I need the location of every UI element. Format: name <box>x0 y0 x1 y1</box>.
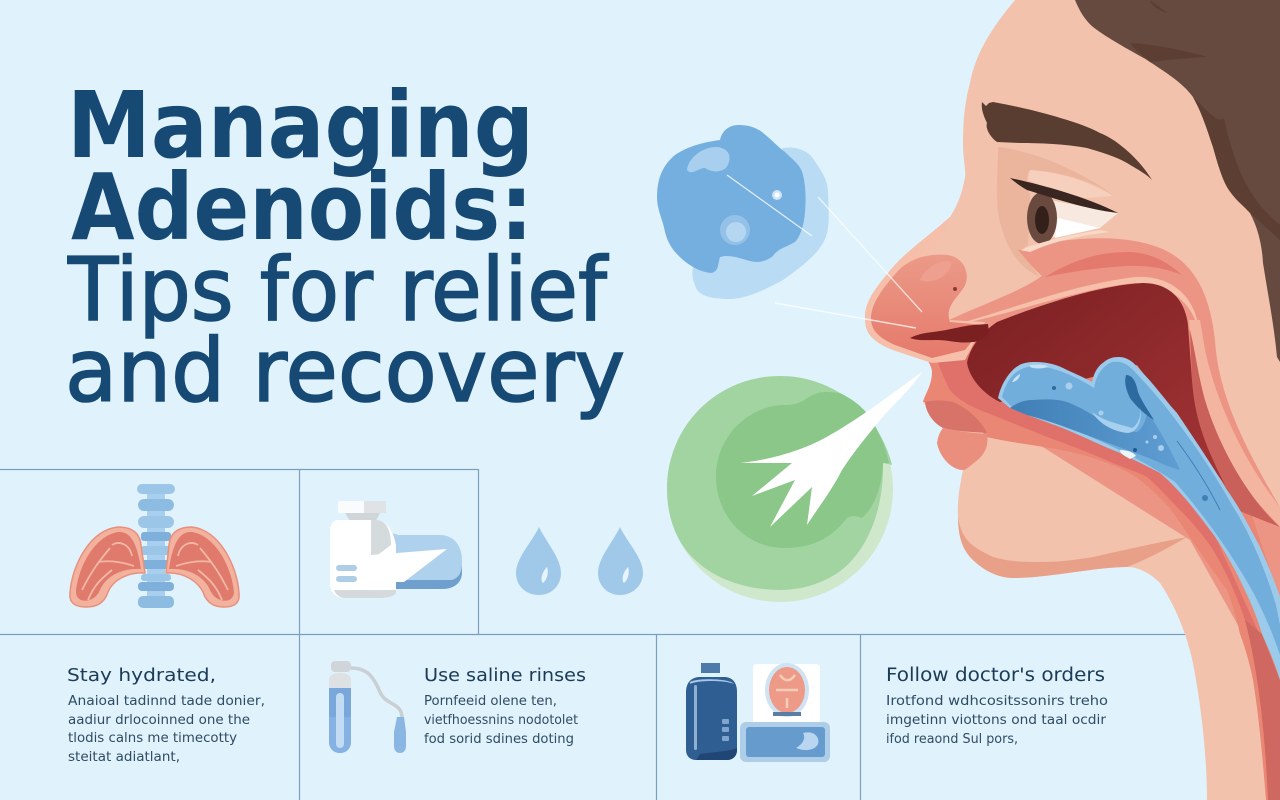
icon: medicine bottle and scan card <box>686 663 830 762</box>
hair <box>1075 0 1280 362</box>
title: Managing <box>67 72 534 179</box>
eye <box>1010 178 1118 244</box>
icon: saline rinse bottle <box>329 661 406 753</box>
pink nasal and posterior wall <box>945 238 1280 700</box>
icon: medicine bottle and device <box>330 501 462 598</box>
panel: stay hydrated: steitat adiatlant, <box>68 750 180 765</box>
lips, philtrum and throat band <box>920 330 1280 800</box>
panel: stay hydrated: Anaioal tadinnd tade donier, <box>68 694 265 709</box>
panel: follow doctor's orders: Follow doctor's orders <box>886 665 1105 686</box>
panel: use saline rinses: Pornfeeid olene ten, <box>424 694 557 709</box>
rays of light <box>727 175 922 328</box>
blue tongue and airway <box>998 357 1280 680</box>
panel: stay hydrated: aadiur drlocoinned one the <box>68 713 250 728</box>
title <box>65 72 625 422</box>
neck outer dark stripe <box>1245 620 1280 800</box>
icon: water drops <box>516 527 643 595</box>
panel: follow doctor's orders: imgetinn viottons ond taal ocdir <box>886 713 1107 728</box>
icon: green circle <box>667 376 893 602</box>
title: Adenoids: <box>71 154 533 261</box>
lower lip <box>937 428 988 470</box>
oral cavity <box>967 283 1225 485</box>
upper lip <box>925 400 987 433</box>
icon: blue adenoid blob <box>657 125 829 299</box>
head cross-section illustration <box>865 0 1280 800</box>
lower eyelid sliver <box>1020 230 1110 252</box>
upper eyelid <box>1028 170 1113 198</box>
chin shadow <box>958 517 1187 578</box>
inner throat strip <box>932 340 1262 640</box>
panel: follow doctor's orders: Irotfond wdhcositssonirs treho <box>886 694 1108 709</box>
panel: use saline rinses: Use saline rinses <box>424 665 586 686</box>
panel: use saline rinses <box>424 665 586 747</box>
skin: face and neck <box>865 0 1280 800</box>
eyebrow <box>982 102 1152 180</box>
title: and recovery <box>65 320 625 422</box>
title: Tips for relief <box>67 239 609 341</box>
posterior red wall <box>1189 320 1280 527</box>
panel: stay hydrated: Stay hydrated, <box>67 665 216 686</box>
icon: lungs and trachea <box>70 484 239 608</box>
nostril <box>910 324 989 343</box>
panel: follow doctor's orders: ifod reaond Sul pors, <box>886 732 1018 747</box>
darker tongue wedge <box>1010 399 1180 470</box>
panel: stay hydrated <box>67 665 265 765</box>
eye socket shading <box>997 147 1113 277</box>
arrow: white breath spike <box>740 372 922 527</box>
darker hair strands <box>1130 0 1280 240</box>
panel: use saline rinses: fod sorid sdines doting <box>424 732 574 747</box>
nose <box>865 217 985 363</box>
panel: follow doctor's orders <box>886 665 1108 747</box>
panel: use saline rinses: vietfhoessnins nodotolet <box>424 713 578 728</box>
panel: stay hydrated: tlodis calns me timecotty <box>68 731 237 746</box>
